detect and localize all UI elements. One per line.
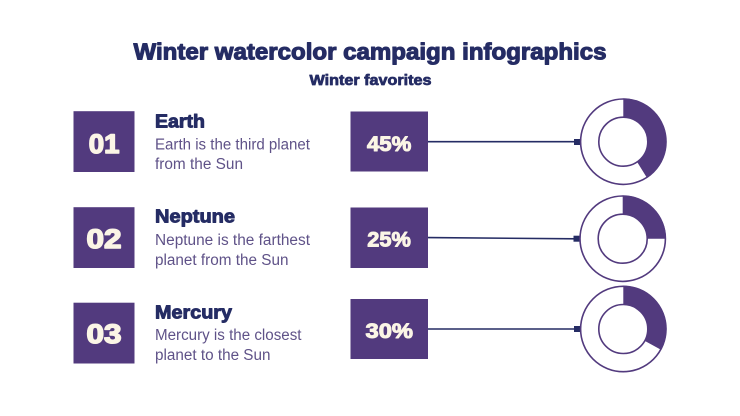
title: Winter watercolor campaign infographics [134,38,606,64]
percent box 25%: 25% [367,229,411,252]
item: Neptune [74,206,311,269]
description: Neptune: planet from the Sun [155,252,288,269]
number box 01: 01 [89,129,120,159]
description: Earth: from the Sun [155,156,243,173]
percent box 25% [350,208,428,268]
percent box 45% [350,112,428,172]
heading: Neptune: Neptune [155,206,235,226]
description: Mercury: planet to the Sun [155,347,270,364]
connector line 1 [428,139,580,145]
description: Mercury: Mercury is the closest [155,327,302,344]
heading: Earth: Earth [155,111,205,131]
donut chart 45% [581,98,667,184]
number box 03 [74,303,134,364]
number box 03: 03 [86,319,122,349]
item: Mercury [74,302,302,364]
connector line 3 [428,326,580,332]
percent box 45%: 45% [367,133,412,156]
number box 02: 02 [86,224,122,254]
description: Earth: Earth is the third planet [155,136,311,153]
subtitle: Winter favorites [310,73,432,89]
donut chart 30% [581,286,667,372]
description: Neptune: Neptune is the farthest [155,232,311,249]
item: Earth [74,111,311,173]
connector line 2 [428,236,580,242]
number box 01 [74,111,134,172]
percent box 30%: 30% [366,320,413,343]
heading: Mercury: Mercury [155,302,232,322]
number box 02 [74,207,134,268]
donut chart 25% [580,195,666,281]
percent box 30% [350,299,428,359]
